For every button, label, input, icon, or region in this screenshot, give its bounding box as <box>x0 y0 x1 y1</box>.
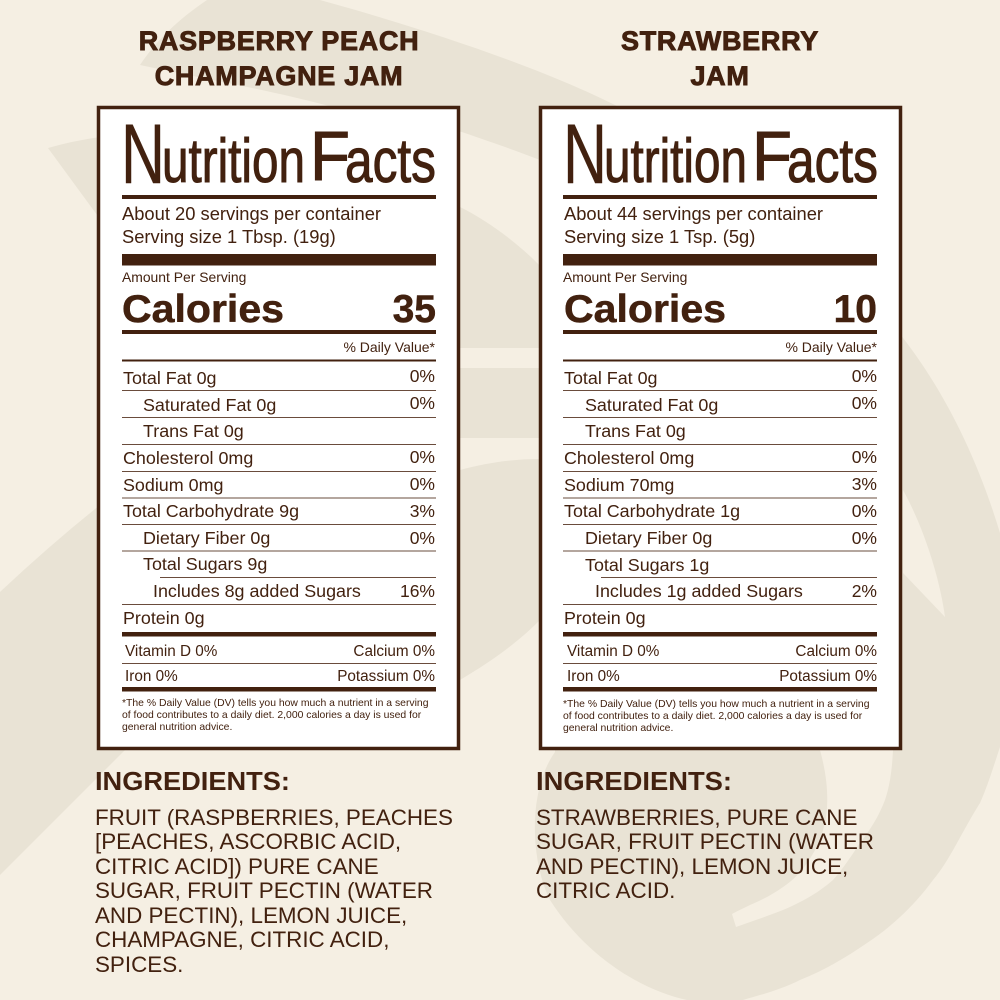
nutrient table: 0% <box>852 528 877 548</box>
vitamins: Iron 0% <box>567 668 620 685</box>
vitamins: Vitamin D 0% <box>567 643 660 660</box>
ingredients: strawberry <box>536 768 874 903</box>
nutrient table: Total Carbohydrate 9g <box>123 501 299 521</box>
nutrition facts title <box>121 107 436 201</box>
nutrient table: Dietary Fiber 0g <box>585 528 712 548</box>
vitamins: Potassium 0% <box>779 668 877 685</box>
nutrition facts title: N <box>563 107 607 201</box>
nutrient table: Protein 0g <box>564 608 646 628</box>
nutrition facts title: N <box>121 107 165 201</box>
vitamins: Potassium 0% <box>337 668 435 685</box>
nutrition facts title: F <box>752 117 792 195</box>
nutrient table: 16% <box>400 581 435 601</box>
nutrient table: 0% <box>410 393 435 413</box>
ingredients: raspberry peach <box>95 768 453 977</box>
nutrient table: Cholesterol 0mg <box>123 448 253 468</box>
nutrient table: 0% <box>410 447 435 467</box>
nutrient table: Total Fat 0g <box>564 368 657 388</box>
nutrition facts title: utrition <box>604 127 747 196</box>
nutrition facts title <box>563 107 878 201</box>
panel: raspberry peach nutrition facts <box>98 107 458 748</box>
nutrient table: 3% <box>852 474 877 494</box>
background light sliver <box>903 490 945 617</box>
nutrient table: Total Fat 0g <box>123 368 216 388</box>
serving info <box>122 203 381 247</box>
nutrition facts title: F <box>310 117 350 195</box>
ingredients: strawberry: INGREDIENTS: <box>536 768 732 796</box>
footnote: of food contributes to a daily diet. 2,000 calories a day is used for <box>563 711 863 722</box>
nutrient table: Dietary Fiber 0g <box>143 528 270 548</box>
calories <box>122 269 436 331</box>
nutrient table: Includes 1g added Sugars <box>595 581 803 601</box>
vitamins: Iron 0% <box>125 668 178 685</box>
footnote: *The % Daily Value (DV) tells you how much a nutrient in a serving <box>563 699 870 710</box>
nutrient table: Saturated Fat 0g <box>585 395 718 415</box>
ingredients: raspberry peach: SUGAR, FRUIT PECTIN (WATER <box>95 878 433 903</box>
background crescent <box>732 750 893 927</box>
nutrient table: 0% <box>410 366 435 386</box>
ingredients: strawberry: CITRIC ACID. <box>536 878 675 903</box>
nutrient table: % Daily Value* <box>785 339 878 355</box>
nutrient table: 0% <box>852 447 877 467</box>
nutrient table: 0% <box>852 501 877 521</box>
calories: 10 <box>834 288 877 331</box>
ingredients: raspberry peach: CHAMPAGNE, CITRIC ACID, <box>95 927 389 952</box>
vitamins: Calcium 0% <box>353 643 435 660</box>
serving info <box>564 203 823 247</box>
nutrient table: 0% <box>852 366 877 386</box>
serving info: Serving size 1 Tsp. (5g) <box>564 226 755 247</box>
heading: raspberry peach champagne jam: CHAMPAGNE JAM <box>155 61 403 91</box>
nutrition facts title: acts <box>787 127 878 196</box>
heading: strawberry jam: STRAWBERRY <box>621 26 819 56</box>
nutrient table: 0% <box>410 474 435 494</box>
footnote: *The % Daily Value (DV) tells you how much a nutrient in a serving <box>122 698 429 709</box>
nutrient table: Sodium 0mg <box>123 475 223 495</box>
nutrient table: Protein 0g <box>123 608 205 628</box>
heading: strawberry jam <box>621 26 819 91</box>
ingredients: raspberry peach: FRUIT (RASPBERRIES, PEACHES <box>95 805 453 830</box>
nutrient table: Total Sugars 9g <box>143 554 267 574</box>
ingredients: strawberry: AND PECTIN), LEMON JUICE, <box>536 854 848 879</box>
nutrition facts title: utrition <box>162 127 305 196</box>
vitamins <box>563 643 877 685</box>
heading: raspberry peach champagne jam: RASPBERRY PEACH <box>139 26 419 56</box>
ingredients: strawberry: SUGAR, FRUIT PECTIN (WATER <box>536 829 874 854</box>
footnote: general nutrition advice. <box>122 722 232 733</box>
heading: raspberry peach champagne jam <box>139 26 419 91</box>
ingredients: raspberry peach: SPICES. <box>95 952 183 977</box>
calories: Calories <box>564 288 726 331</box>
ingredients: strawberry: STRAWBERRIES, PURE CANE <box>536 805 857 830</box>
calories: 35 <box>393 288 436 331</box>
nutrient table: Sodium 70mg <box>564 475 674 495</box>
footnote: general nutrition advice. <box>563 723 673 734</box>
ingredients: raspberry peach: AND PECTIN), LEMON JUICE, <box>95 903 407 928</box>
ingredients: raspberry peach: CITRIC ACID]) PURE CANE <box>95 854 379 879</box>
nutrient table: 3% <box>410 501 435 521</box>
footnote <box>122 698 429 733</box>
nutrient table: Total Sugars 1g <box>585 555 709 575</box>
nutrient table <box>122 339 436 628</box>
calories: Amount Per Serving <box>563 269 687 285</box>
serving info: About 44 servings per container <box>564 203 823 224</box>
panel: strawberry nutrition facts <box>540 107 900 748</box>
heading: strawberry jam: JAM <box>690 61 750 91</box>
footnote: of food contributes to a daily diet. 2,000 calories a day is used for <box>122 710 422 721</box>
nutrient table: Trans Fat 0g <box>585 421 686 441</box>
vitamins: Vitamin D 0% <box>125 643 218 660</box>
calories: Calories <box>122 288 284 331</box>
nutrient table: 0% <box>852 393 877 413</box>
vitamins: Calcium 0% <box>795 643 877 660</box>
nutrient table: 0% <box>410 528 435 548</box>
serving info: Serving size 1 Tbsp. (19g) <box>122 226 336 247</box>
serving info: About 20 servings per container <box>122 203 381 224</box>
nutrient table: % Daily Value* <box>343 339 436 355</box>
ingredients: raspberry peach: INGREDIENTS: <box>95 768 290 796</box>
nutrient table <box>563 339 878 628</box>
nutrient table: Cholesterol 0mg <box>564 448 694 468</box>
nutrition facts title: acts <box>345 127 436 196</box>
nutrient table: 2% <box>852 581 877 601</box>
nutrient table: Total Carbohydrate 1g <box>564 501 740 521</box>
nutrient table: Trans Fat 0g <box>143 421 244 441</box>
ingredients: raspberry peach: [PEACHES, ASCORBIC ACID, <box>95 829 401 854</box>
calories <box>563 269 877 331</box>
footnote <box>563 699 870 734</box>
calories: Amount Per Serving <box>122 269 246 285</box>
nutrient table: Saturated Fat 0g <box>143 395 276 415</box>
nutrient table: Includes 8g added Sugars <box>153 581 361 601</box>
vitamins <box>122 643 436 685</box>
